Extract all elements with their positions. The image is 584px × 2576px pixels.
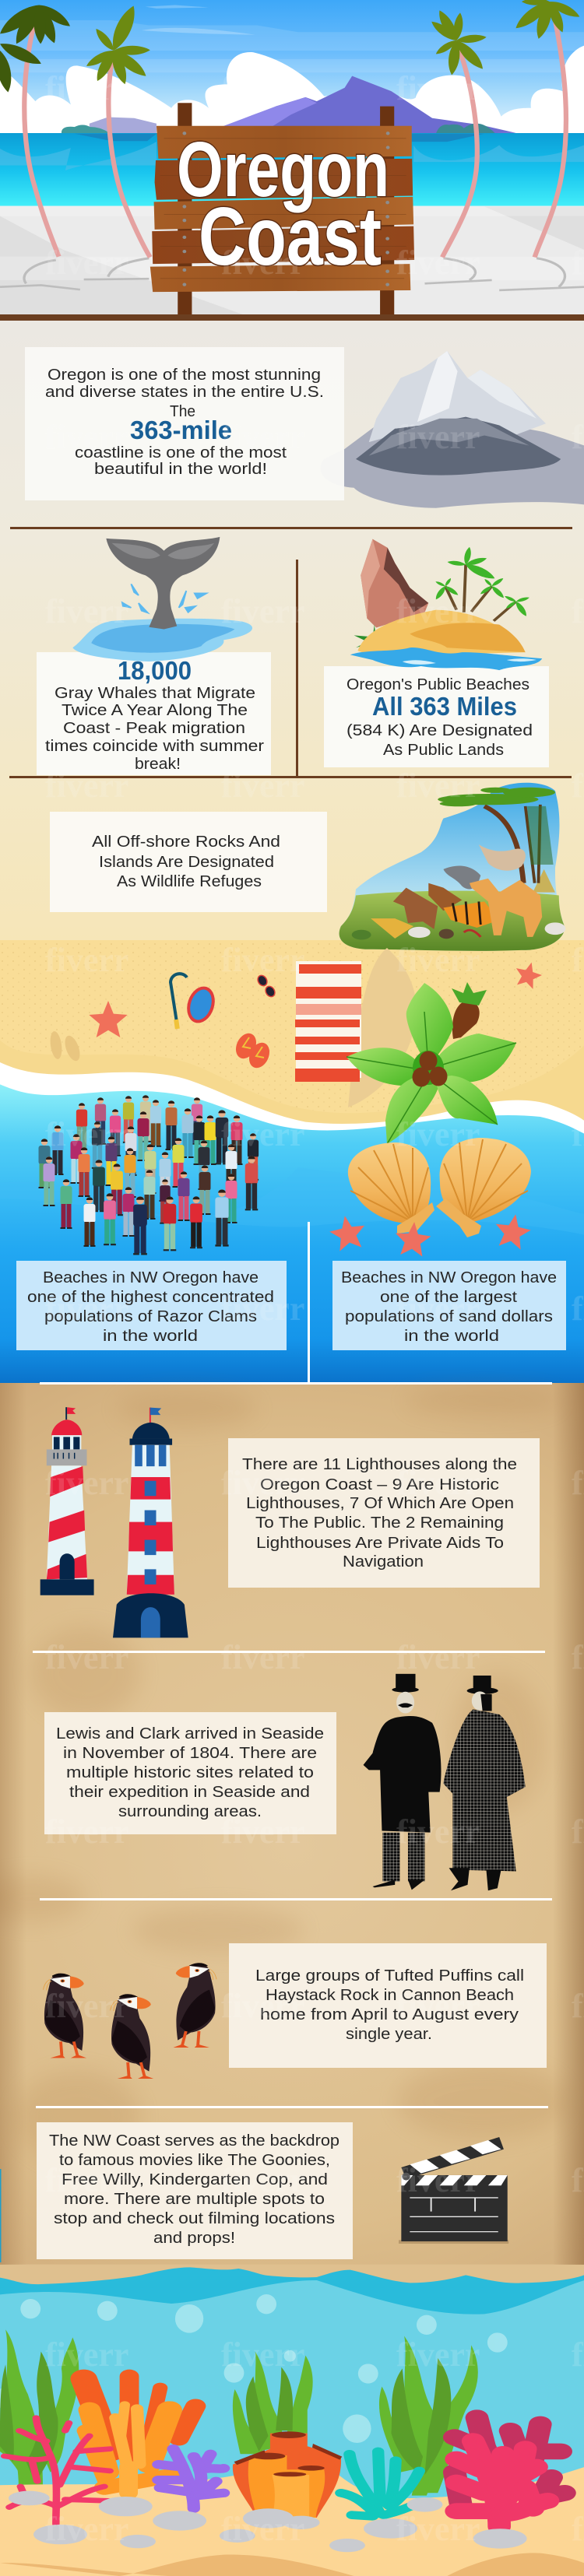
text box: Lewis and Clark: their expedition in Seaside and	[69, 1784, 310, 1801]
text box: whales: Gray Whales that Migrate	[55, 685, 255, 702]
purple coral	[158, 2449, 223, 2508]
title	[177, 126, 389, 283]
text box: whales	[37, 652, 271, 775]
icon: film clapperboard	[399, 2137, 508, 2244]
watermarks: fiverr	[45, 244, 128, 282]
text box: intro: coastline is one of the most	[75, 444, 287, 462]
watermarks: fiverr	[396, 2510, 480, 2548]
text box: whales: break!	[135, 756, 181, 773]
text box: wildlife refuges: As Wildlife Refuges	[117, 873, 262, 890]
text box: Lewis and Clark: in November of 1804. There are	[63, 1745, 317, 1762]
watermarks: fiverr	[396, 2336, 480, 2374]
icon: sunglasses	[256, 974, 276, 998]
text box: lighthouses: Navigation	[343, 1553, 424, 1571]
text box: intro: The	[170, 403, 195, 420]
orange coral	[84, 2376, 195, 2493]
text box: Lewis and Clark: Lewis and Clark arrived in Seaside	[56, 1725, 324, 1742]
seaweed	[0, 2329, 478, 2496]
text box: whales: Coast - Peak migration	[63, 720, 245, 737]
text box: intro	[25, 347, 344, 500]
title: Coast	[199, 191, 382, 283]
sea waves and beach	[0, 134, 584, 316]
icon: wildlife scene	[339, 783, 565, 951]
text box: puffins: Haystack Rock in Cannon Beach	[266, 1987, 514, 2004]
watermarks: fiverr	[396, 1813, 480, 1851]
text box: public beaches: (584 K) Are Designated	[347, 722, 533, 739]
header illustration	[0, 5, 584, 134]
watermarks: fiverr	[45, 1987, 128, 2025]
icon: footprints	[49, 1030, 83, 1063]
red coral	[5, 2418, 110, 2524]
divider lines	[9, 560, 572, 778]
icon: whale tail	[72, 537, 252, 662]
watermarks: fiverr	[45, 941, 128, 979]
text box: whales: Twice A Year Along The	[62, 702, 248, 719]
watermarks: fiverr	[221, 69, 304, 107]
icon: snowy mountain	[320, 351, 584, 508]
icon: scallop shells	[327, 1138, 533, 1257]
brown divider band	[0, 314, 584, 321]
icon: striped towel	[295, 961, 361, 1082]
watermarks: fiverr	[221, 1290, 304, 1328]
text box: intro: beautiful in the world!	[94, 461, 267, 478]
text box: razor clams: in the world	[103, 1328, 198, 1345]
wooden sign	[150, 103, 414, 316]
text box: razor clams: one of the highest concentrated	[27, 1289, 274, 1306]
watermarks: fiverr	[45, 2510, 128, 2548]
text box: movies: stop and check out filming locations	[54, 2210, 335, 2227]
watermarks: fiverr	[396, 418, 480, 456]
text box: puffins: home from April to August every	[260, 2006, 519, 2023]
text box: intro: 363-mile	[130, 416, 232, 444]
watermarks: fiverr	[221, 2510, 304, 2548]
text box: puffins: single year.	[346, 2026, 432, 2043]
watermarks: fiverr	[45, 69, 128, 107]
distant islands	[62, 76, 516, 134]
watermarks: fiverr	[396, 244, 480, 282]
icon: palm leaves and coconuts	[347, 982, 516, 1144]
title: Oregon	[177, 126, 389, 213]
text box: public beaches: Oregon's Public Beaches	[347, 676, 529, 693]
panel: parchment	[0, 1222, 584, 2284]
underwater scene	[0, 2261, 584, 2576]
text box: movies: Free Willy, Kindergarten Cop, and	[62, 2171, 328, 2188]
text box: whales: 18,000	[118, 656, 192, 685]
text box: movies: to famous movies like The Goonies,	[59, 2152, 330, 2169]
text box: lighthouses: There are 11 Lighthouses along the	[242, 1456, 517, 1473]
watermarks: fiverr	[221, 941, 304, 979]
watermarks: fiverr	[396, 2161, 480, 2199]
sand	[0, 940, 584, 1139]
text box: razor clams: Beaches in NW Oregon have	[43, 1269, 259, 1286]
text box: wildlife refuges	[50, 812, 327, 912]
watermarks: fiverr	[221, 418, 304, 456]
text box: Lewis and Clark	[44, 1712, 336, 1834]
watermarks: fiverr	[396, 1638, 480, 1676]
man with top hat	[364, 1674, 442, 1890]
text box: Lewis and Clark: surrounding areas.	[118, 1803, 262, 1820]
top wave	[0, 2265, 584, 2315]
watermarks: fiverr	[221, 1987, 304, 2025]
sky	[0, 0, 584, 134]
text box: public beaches: All 363 Miles	[372, 692, 517, 721]
clouds	[0, 46, 584, 134]
text box: movies: and props!	[153, 2230, 235, 2247]
bubbles	[0, 2294, 508, 2443]
icon: snorkel and mask	[171, 974, 220, 1029]
watermarks: fiverr	[396, 1290, 480, 1328]
watermarks: fiverr	[396, 69, 480, 107]
sand floor	[0, 2467, 584, 2576]
watermarks: fiverr	[45, 1464, 128, 1502]
text box: puffins: Large groups of Tufted Puffins call	[255, 1967, 524, 1985]
watermarks: fiverr	[221, 2161, 304, 2199]
watermarks: fiverr	[221, 2336, 304, 2374]
watermarks: fiverr	[221, 1813, 304, 1851]
text box: wildlife refuges: Islands Are Designated	[99, 854, 274, 871]
text box: Lewis and Clark: multiple historic sites related to	[66, 1764, 314, 1781]
text box: sand dollars: Beaches in NW Oregon have	[341, 1269, 557, 1286]
watermarks: fiverr	[221, 767, 304, 805]
text box: whales: times coincide with summer	[45, 738, 264, 755]
small lighthouse	[40, 1407, 94, 1595]
sea background	[0, 2261, 584, 2576]
man in cape	[443, 1676, 526, 1890]
watermarks: fiverr	[396, 941, 480, 979]
text box: lighthouses: Lighthouses, 7 Of Which Are Open	[246, 1495, 514, 1512]
panel: sand dollars	[327, 1138, 566, 1350]
white dividers	[33, 1222, 552, 2108]
watermarks: fiverr	[221, 1638, 304, 1676]
orange sponge coral	[233, 2431, 342, 2518]
text box: sand dollars: in the world	[404, 1328, 499, 1345]
text box: public beaches: As Public Lands	[383, 742, 504, 759]
watermarks: fiverr	[45, 2336, 128, 2374]
watermarks: fiverr	[45, 2161, 128, 2199]
watermarks: fiverr	[45, 1638, 128, 1676]
panel: beach header scene	[0, 0, 584, 321]
watermarks: fiverr	[45, 1115, 128, 1153]
panel: razor clams	[16, 1095, 287, 1350]
icon: starfish	[89, 959, 544, 1037]
icon: flip flops	[232, 1030, 273, 1071]
crowd of people	[39, 1095, 259, 1255]
text box: intro: and diverse states in the entire U.S.	[45, 384, 324, 401]
text box: intro: Oregon is one of the most stunning	[47, 367, 321, 384]
watermarks: fiverr	[396, 1464, 480, 1502]
teal coral	[341, 2451, 419, 2516]
beach items	[49, 948, 544, 1144]
watermarks: fiverr	[396, 767, 480, 805]
panel: gray whales	[37, 537, 271, 775]
text box: lighthouses	[228, 1438, 540, 1588]
text box: lighthouses: To The Public. The 2 Remaining	[255, 1514, 504, 1532]
palm trees	[0, 0, 584, 290]
panel: intro	[25, 347, 584, 508]
watermarks: fiverr	[396, 1987, 480, 2025]
watermarks: fiverr	[396, 1115, 480, 1153]
icon: lighthouses	[40, 1407, 188, 1637]
parchment background	[0, 1383, 584, 2284]
text box: sand dollars: populations of sand dollars	[345, 1308, 553, 1325]
icon: tufted puffins	[44, 1963, 216, 2079]
watermarks: fiverr	[45, 1290, 128, 1328]
watermarks: fiverr	[45, 592, 128, 630]
icon: Lewis and Clark figures	[364, 1674, 526, 1890]
rocks	[9, 2491, 527, 2552]
watermarks: fiverr	[396, 592, 480, 630]
text box: movies: The NW Coast serves as the backdrop	[49, 2132, 339, 2150]
sea	[0, 133, 584, 206]
watermarks: fiverr	[45, 1813, 128, 1851]
panel: beach sand and water	[0, 940, 584, 1384]
watermarks: fiverr	[221, 1464, 304, 1502]
text box: movies	[37, 2122, 353, 2259]
watermarks: fiverr	[221, 592, 304, 630]
tree shadows	[0, 258, 584, 290]
large lighthouse	[113, 1408, 188, 1637]
watermarks: fiverr	[45, 767, 128, 805]
watermarks: fiverr	[221, 1115, 304, 1153]
text box: sand dollars	[332, 1261, 566, 1350]
text box: lighthouses: Oregon Coast – 9 Are Historic	[260, 1476, 499, 1493]
pink coral	[455, 2418, 565, 2527]
panel: wildlife refuges	[50, 783, 565, 951]
text box: sand dollars: one of the largest	[380, 1289, 517, 1306]
text box: puffins	[229, 1943, 547, 2068]
panel: public beaches	[324, 539, 549, 767]
icon: island with rock and palms	[350, 539, 542, 670]
watermarks: fiverr	[45, 418, 128, 456]
page background	[0, 321, 584, 943]
text box: razor clams	[16, 1261, 287, 1350]
icon: beach mat leaf	[348, 948, 417, 1107]
text box: wildlife refuges: All Off-shore Rocks And	[92, 834, 280, 851]
shoreline	[0, 1041, 584, 1384]
text box: public beaches	[324, 666, 549, 767]
text box: movies: more. There are multiple spots to	[64, 2191, 325, 2208]
watermarks: fiverr	[221, 244, 304, 282]
text box: lighthouses: Lighthouses Are Private Aids To	[256, 1535, 504, 1552]
text box: razor clams: populations of Razor Clams	[44, 1308, 257, 1325]
